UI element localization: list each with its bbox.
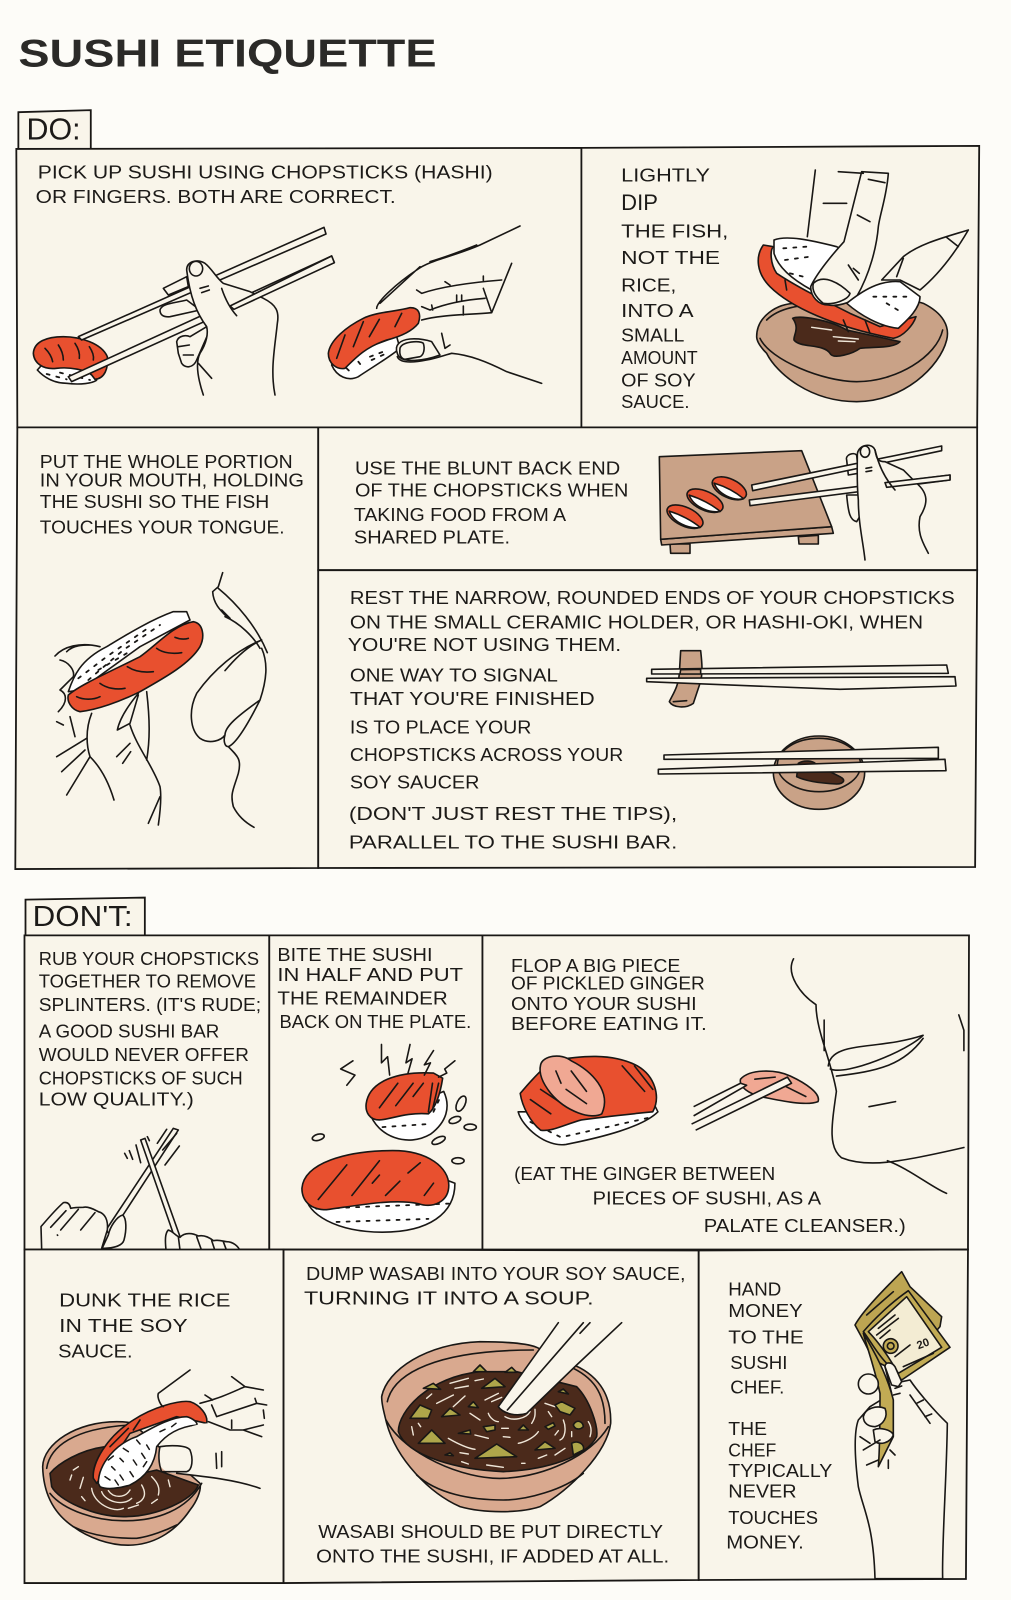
text: lightly dip: NOT THE xyxy=(621,247,720,268)
text: lightly dip: INTO A xyxy=(621,300,695,321)
text: lightly dip: LIGHTLY xyxy=(621,165,710,186)
text: wasabi note: ONTO THE SUSHI, IF ADDED AT ALL. xyxy=(316,1546,669,1567)
text: flop ginger: ONTO YOUR SUSHI xyxy=(511,993,697,1014)
text: flop ginger: OF PICKLED GINGER xyxy=(511,972,705,993)
panel: rest chopsticks xyxy=(318,570,977,868)
text: hand money: HAND xyxy=(728,1278,781,1299)
DO section xyxy=(15,110,979,869)
text: ginger note xyxy=(514,1163,906,1236)
panel: bite the sushi xyxy=(269,935,482,1250)
text: lightly dip xyxy=(621,165,728,412)
text: bite the sushi: IN HALF AND PUT xyxy=(277,964,463,985)
text: rest chopsticks: YOU'RE NOT USING THEM. xyxy=(348,634,621,655)
illustration: chopsticks holding sushi xyxy=(33,227,334,395)
text: bite the sushi xyxy=(277,944,471,1032)
text: hand money: TO THE xyxy=(728,1326,804,1347)
title: SUSHI ETIQUETTE xyxy=(18,32,437,75)
text: bite the sushi: BITE THE SUSHI xyxy=(277,944,432,965)
text: dump wasabi: TURNING IT INTO A SOUP. xyxy=(304,1288,594,1309)
text: blunt end: OF THE CHOPSTICKS WHEN xyxy=(355,480,628,501)
text: flop ginger: FLOP A BIG PIECE xyxy=(511,955,680,976)
illustration: fingers holding sushi xyxy=(328,226,542,383)
text: lightly dip: SAUCE. xyxy=(621,391,690,412)
text: blunt end: TAKING FOOD FROM A xyxy=(354,504,567,525)
text: pick up sushi xyxy=(36,161,493,207)
DO tab xyxy=(18,110,91,149)
text: ginger note: PIECES OF SUSHI, AS A xyxy=(593,1188,822,1209)
panel: pick up sushi xyxy=(16,148,581,427)
text: hand money: MONEY. xyxy=(726,1531,804,1552)
text: hand money xyxy=(726,1278,832,1552)
illustration: chopsticks, ginger and mouth xyxy=(692,959,964,1193)
text: pick up sushi: OR FINGERS. BOTH ARE CORRECT. xyxy=(36,186,396,207)
illustration: hand holding money: 20 xyxy=(915,1337,931,1352)
illustration: dunking sushi xyxy=(43,1370,267,1545)
text: rest chopsticks: SOY SAUCER xyxy=(350,771,479,792)
text: rub chopsticks: WOULD NEVER OFFER xyxy=(39,1044,249,1065)
text: blunt end: SHARED PLATE. xyxy=(354,527,510,548)
text: rub chopsticks: LOW QUALITY.) xyxy=(39,1089,194,1110)
text: rest chopsticks xyxy=(348,587,955,853)
text: dump wasabi: DUMP WASABI INTO YOUR SOY SAUCE, xyxy=(306,1263,685,1284)
text: hand money: CHEF. xyxy=(730,1376,784,1397)
text: rest chopsticks: ONE WAY TO SIGNAL xyxy=(350,664,558,685)
text: bite the sushi: THE REMAINDER xyxy=(277,988,448,1009)
DON'T tab xyxy=(26,898,145,935)
text: dunk: IN THE SOY xyxy=(59,1315,188,1336)
illustration: sushi board and chopsticks xyxy=(659,445,950,560)
text: hand money: TYPICALLY xyxy=(728,1460,832,1481)
text: wasabi note: WASABI SHOULD BE PUT DIRECTLY xyxy=(318,1521,663,1542)
illustration: rubbing chopsticks xyxy=(41,1128,240,1251)
illustration: bitten sushi xyxy=(302,1044,476,1232)
text: whole portion: THE SUSHI SO THE FISH xyxy=(40,491,269,512)
text: hand money: MONEY xyxy=(728,1300,803,1321)
text: lightly dip: RICE, xyxy=(621,275,676,296)
text: rub chopsticks: SPLINTERS. (IT'S RUDE; xyxy=(39,994,261,1015)
text: rest chopsticks: THAT YOU'RE FINISHED xyxy=(350,688,595,709)
text: bite the sushi: BACK ON THE PLATE. xyxy=(279,1011,471,1032)
text: hand money: CHEF xyxy=(728,1440,776,1461)
text: hand money: NEVER xyxy=(728,1480,797,1501)
text: rest chopsticks: (DON'T JUST REST THE TIPS), xyxy=(349,803,677,824)
illustration: sushi with ginger xyxy=(518,1056,658,1145)
text: pick up sushi: PICK UP SUSHI USING CHOPSTICKS (HASHI) xyxy=(38,161,493,182)
text: rest chopsticks: REST THE NARROW, ROUNDED ENDS OF YOUR CHOPSTICKS xyxy=(350,587,955,608)
text: blunt end: USE THE BLUNT BACK END xyxy=(355,457,620,478)
text: rub chopsticks: TOGETHER TO REMOVE xyxy=(39,970,256,991)
illustration: chopsticks across saucer xyxy=(658,736,946,809)
text: rub chopsticks: A GOOD SUSHI BAR xyxy=(39,1020,219,1041)
illustration: hand holding money xyxy=(855,1272,950,1579)
text: ginger note: (EAT THE GINGER BETWEEN xyxy=(514,1163,775,1184)
text: lightly dip: AMOUNT xyxy=(621,347,698,368)
text: blunt end xyxy=(354,457,628,548)
illustration: chopsticks on hashi-oki xyxy=(647,651,956,707)
text: dunk xyxy=(58,1290,231,1362)
panel: blunt back end xyxy=(318,427,977,570)
illustration: wasabi soup bowl xyxy=(382,1323,622,1512)
DON'T section xyxy=(24,898,969,1583)
text: dunk: DUNK THE RICE xyxy=(59,1290,231,1311)
text: dump wasabi xyxy=(304,1263,685,1309)
text: wasabi note xyxy=(316,1521,669,1567)
panel: flop ginger xyxy=(482,935,969,1250)
text: lightly dip: OF SOY xyxy=(621,370,696,391)
text: whole portion: TOUCHES YOUR TONGUE. xyxy=(40,516,285,537)
text: rub chopsticks xyxy=(39,948,261,1110)
text: whole portion: IN YOUR MOUTH, HOLDING xyxy=(40,470,304,491)
illustration: sushi to mouth xyxy=(55,573,267,827)
text: rest chopsticks: IS TO PLACE YOUR xyxy=(350,716,531,737)
text: whole portion xyxy=(40,451,304,537)
text: rest chopsticks: ON THE SMALL CERAMIC HOLDER, OR HASHI-OKI, WHEN xyxy=(350,611,923,632)
text: flop ginger: BEFORE EATING IT. xyxy=(511,1013,707,1034)
text: hand money: SUSHI xyxy=(730,1352,787,1373)
text: hand money: TOUCHES xyxy=(728,1507,818,1528)
panel: rub chopsticks xyxy=(24,935,269,1251)
text: rub chopsticks: RUB YOUR CHOPSTICKS xyxy=(39,948,259,969)
illustration: dipping sushi in soy dish xyxy=(757,170,968,402)
text: lightly dip: THE FISH, xyxy=(621,221,728,242)
panel: lightly dip xyxy=(581,146,979,427)
text: rest chopsticks: CHOPSTICKS ACROSS YOUR xyxy=(350,744,623,765)
text: lightly dip: SMALL xyxy=(621,325,684,346)
text: whole portion: PUT THE WHOLE PORTION xyxy=(40,451,293,472)
text: lightly dip: DIP xyxy=(621,190,658,215)
panel: whole portion xyxy=(15,427,318,869)
text: flop ginger xyxy=(511,955,707,1034)
panel: dunk the rice xyxy=(24,1250,284,1583)
panel: hand money xyxy=(699,1250,968,1580)
text: hand money: THE xyxy=(728,1418,767,1439)
text: rest chopsticks: PARALLEL TO THE SUSHI BAR. xyxy=(349,832,677,853)
text: rub chopsticks: CHOPSTICKS OF SUCH xyxy=(39,1067,243,1088)
text: ginger note: PALATE CLEANSER.) xyxy=(704,1215,906,1236)
text: dunk: SAUCE. xyxy=(58,1341,133,1362)
DON'T tab: DON'T: xyxy=(33,901,133,933)
panel: dump wasabi xyxy=(284,1250,699,1583)
DO tab: DO: xyxy=(27,113,81,147)
